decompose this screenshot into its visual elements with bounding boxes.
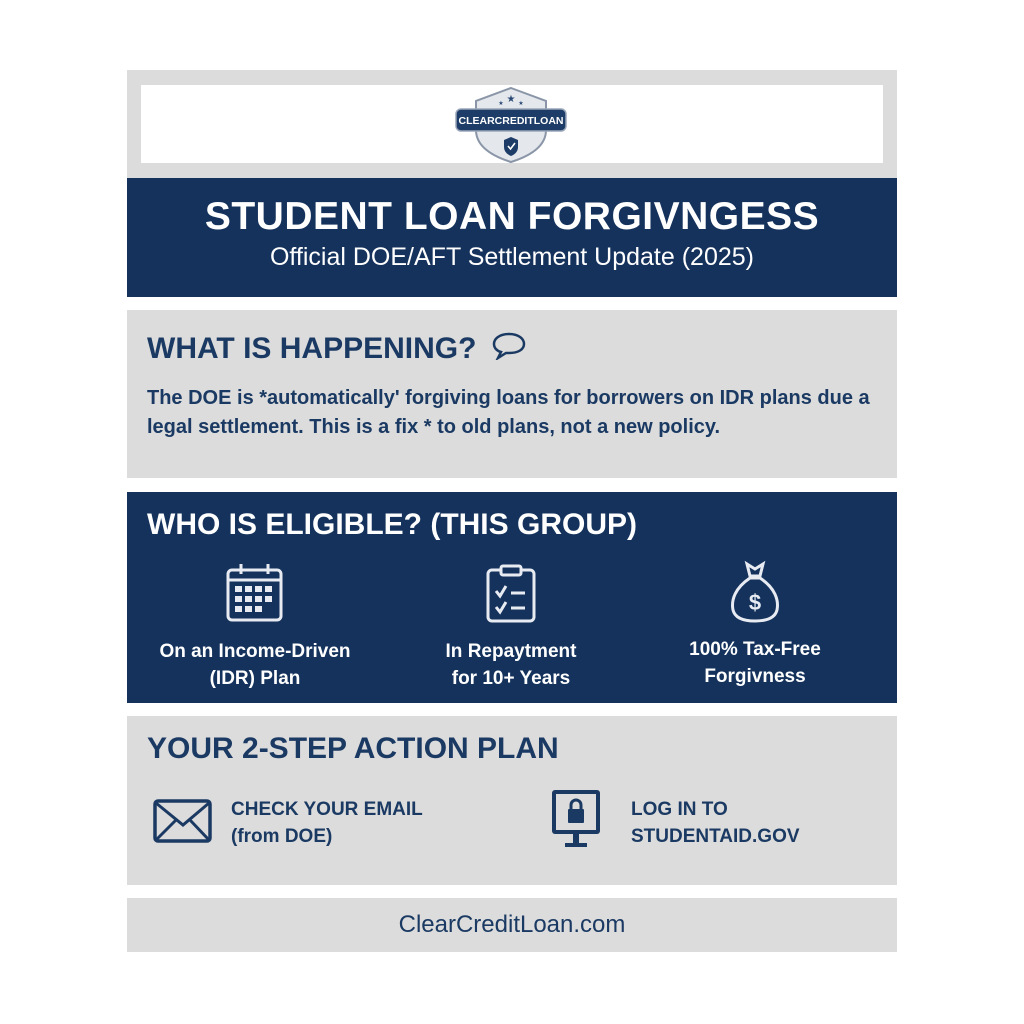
panel: what is happening: [127, 310, 897, 478]
heading: WHAT IS HAPPENING?: [147, 332, 476, 365]
step 1: (from DOE): [231, 826, 332, 847]
title: STUDENT LOAN FORGIVNGESS: [205, 195, 819, 238]
icon: shield logo: CLEARCREDITLOAN: [458, 115, 564, 127]
icon: envelope: [153, 799, 212, 843]
subtitle: Official DOE/AFT Settlement Update (2025): [270, 243, 754, 271]
header banner: [127, 178, 897, 297]
footer: [127, 898, 897, 952]
step 1: [153, 799, 423, 847]
body text: The DOE is *automatically' forgiving loans for borrowers on IDR plans due a legal settlement. This is a fix * to old plans, not a new policy.: [147, 387, 870, 438]
item: repayment: [446, 564, 576, 689]
icon: clipboard: [486, 564, 536, 622]
item: IDR plan: On an Income-Driven: [159, 641, 351, 662]
item: IDR plan: [159, 564, 351, 689]
step 2: [552, 790, 800, 847]
top frame with logo: [127, 70, 897, 178]
item: tax free: Forgivness: [704, 666, 806, 687]
panel: who is eligible: [127, 492, 897, 703]
item: repayment: for 10+ Years: [452, 668, 570, 689]
icon: monitor lock: [552, 790, 600, 847]
item: tax free: 100% Tax-Free: [689, 639, 821, 660]
footer: ClearCreditLoan.com: [399, 911, 625, 938]
logo box: [141, 85, 883, 163]
icon: money bag: [731, 560, 779, 622]
step 2: LOG IN TO: [631, 799, 728, 820]
heading: WHO IS ELIGIBLE? (THIS GROUP): [147, 508, 637, 541]
icon: money bag: $: [749, 590, 761, 615]
step 1: CHECK YOUR EMAIL: [231, 799, 423, 820]
icon: shield logo: ★: [498, 100, 504, 107]
icon: shield logo: ★: [518, 100, 524, 107]
icon: shield logo: [455, 86, 567, 163]
icon: calendar: [226, 564, 282, 622]
item: tax free: [689, 560, 821, 687]
panel: action plan: [127, 716, 897, 885]
heading: YOUR 2-STEP ACTION PLAN: [147, 732, 559, 765]
icon: shield logo: ★: [507, 94, 516, 105]
step 2: STUDENTAID.GOV: [631, 826, 800, 847]
item: repayment: In Repaytment: [446, 641, 576, 662]
item: IDR plan: (IDR) Plan: [210, 668, 300, 689]
